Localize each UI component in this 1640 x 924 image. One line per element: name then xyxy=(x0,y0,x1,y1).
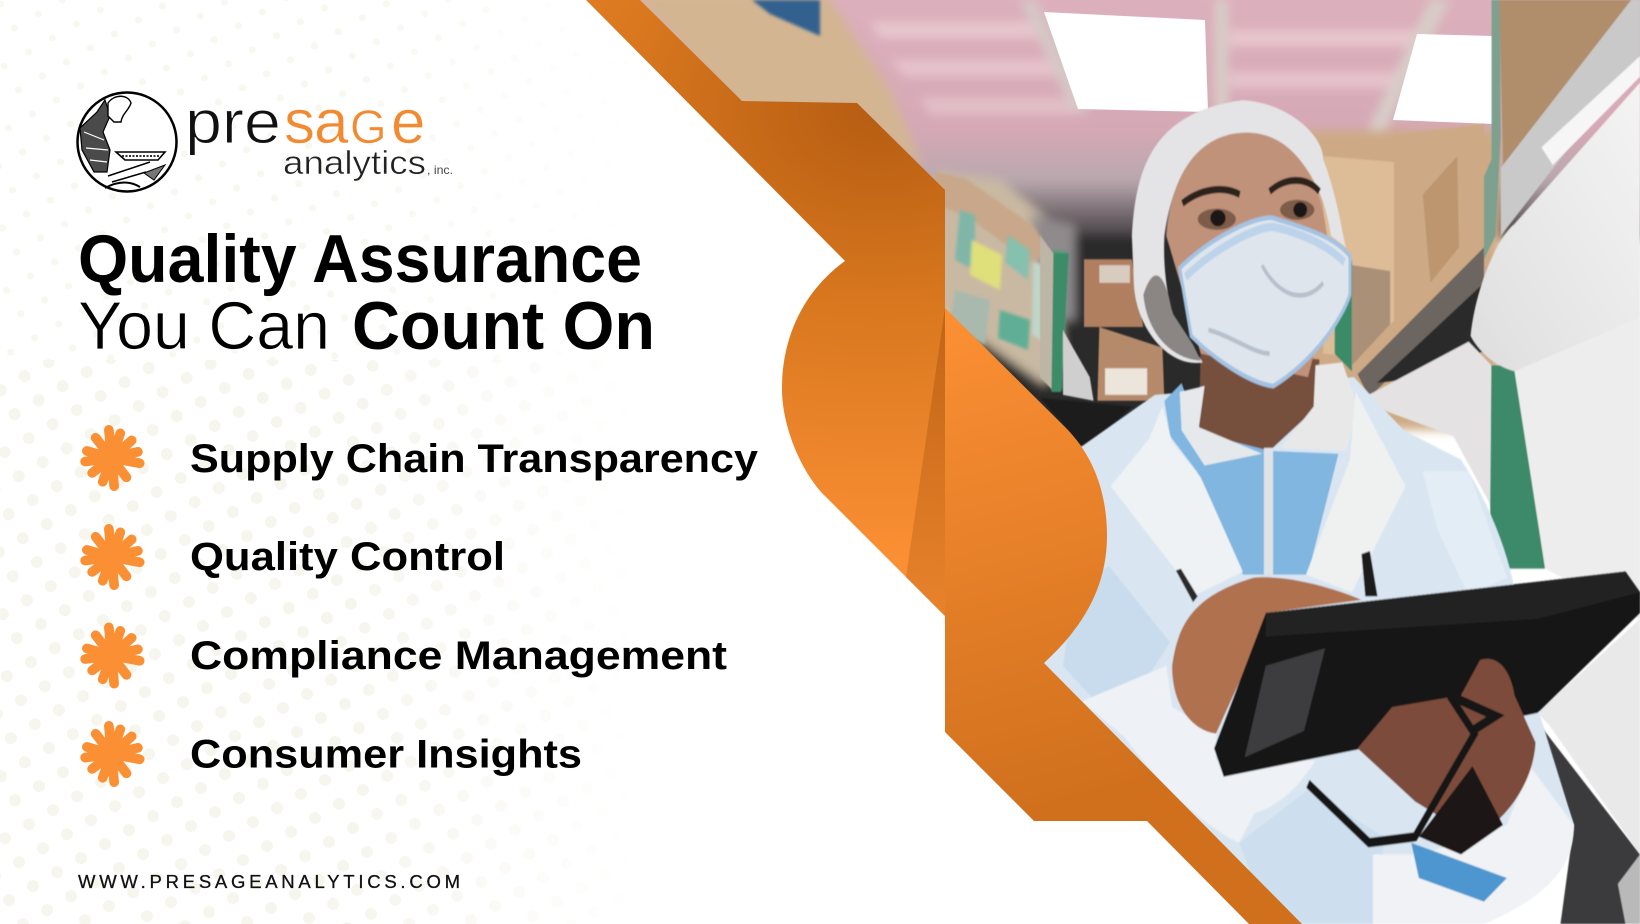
left lapel xyxy=(1111,407,1243,595)
box tops xyxy=(935,172,1050,262)
lower ribbon band xyxy=(945,308,1302,924)
writing hand xyxy=(1172,577,1361,734)
tablet xyxy=(1214,572,1640,777)
wordmark pre: pre xyxy=(185,88,281,156)
icon: orange burst 2 xyxy=(85,529,140,585)
eyebrows xyxy=(1182,180,1319,203)
wordmark analytics: analytics xyxy=(283,144,426,181)
logo emblem: figure with bowl xyxy=(78,92,176,192)
item: Consumer Insights: Consumer Insights xyxy=(190,732,582,776)
title line 2 bold: Count On xyxy=(352,288,655,364)
logo xyxy=(78,88,453,192)
title xyxy=(78,221,655,364)
face xyxy=(1166,133,1329,377)
fold shadow wedge xyxy=(906,308,945,616)
hood collar left xyxy=(1180,386,1262,466)
left background cartons xyxy=(1040,236,1164,451)
zipper xyxy=(1264,448,1273,575)
person xyxy=(1025,100,1640,924)
ceiling and background xyxy=(630,0,1640,450)
wordmark inc: , inc. xyxy=(427,163,453,177)
white sack and cloth roll xyxy=(1471,83,1640,924)
right background cartons and shelving xyxy=(1323,0,1640,507)
icon: orange burst 3 xyxy=(85,627,140,684)
wordmark sage: e xyxy=(391,88,425,157)
website footer: WWW.PRESAGEANALYTICS.COM xyxy=(78,871,460,892)
item: Quality Control: Quality Control xyxy=(190,535,505,579)
box label blue xyxy=(752,0,820,36)
orange ribbon shape xyxy=(586,0,1302,924)
face mask xyxy=(1180,218,1350,386)
tablet strap xyxy=(1308,695,1495,843)
icon: orange burst 4 xyxy=(85,726,140,782)
lower left sleeve xyxy=(1082,666,1316,843)
wordmark sage: s xyxy=(284,88,315,157)
upper ribbon band xyxy=(586,0,945,616)
wordmark sage: a xyxy=(314,88,349,157)
coat folds xyxy=(1423,471,1507,595)
icon: orange burst 1 xyxy=(85,430,140,486)
title line 1: Quality Assurance xyxy=(78,221,642,297)
lanyard xyxy=(1361,551,1378,596)
hood collar right xyxy=(1281,362,1358,451)
eyes xyxy=(1198,209,1236,230)
holding hand xyxy=(1358,659,1536,837)
item: Compliance Management: Compliance Management xyxy=(190,634,727,678)
neck xyxy=(1199,348,1319,451)
photo: quality inspector in warehouse xyxy=(630,0,1640,924)
box labels xyxy=(950,210,1067,390)
ceiling light left xyxy=(1044,12,1208,112)
item: Supply Chain Transparency: Supply Chain Transparency xyxy=(190,437,759,481)
right lapel xyxy=(1306,392,1405,592)
background and person detail, in local photo coordinates xyxy=(1025,0,1640,924)
list of services xyxy=(85,430,759,782)
hairnet xyxy=(1132,100,1346,363)
blue shirt xyxy=(1164,383,1339,575)
dotted background pattern xyxy=(0,0,504,924)
lower right sleeve xyxy=(1373,766,1574,924)
title line 2 light: You Can xyxy=(78,288,330,364)
ceiling light right xyxy=(1393,34,1494,124)
lab coat xyxy=(1044,376,1574,871)
wordmark sage: G xyxy=(350,100,387,153)
